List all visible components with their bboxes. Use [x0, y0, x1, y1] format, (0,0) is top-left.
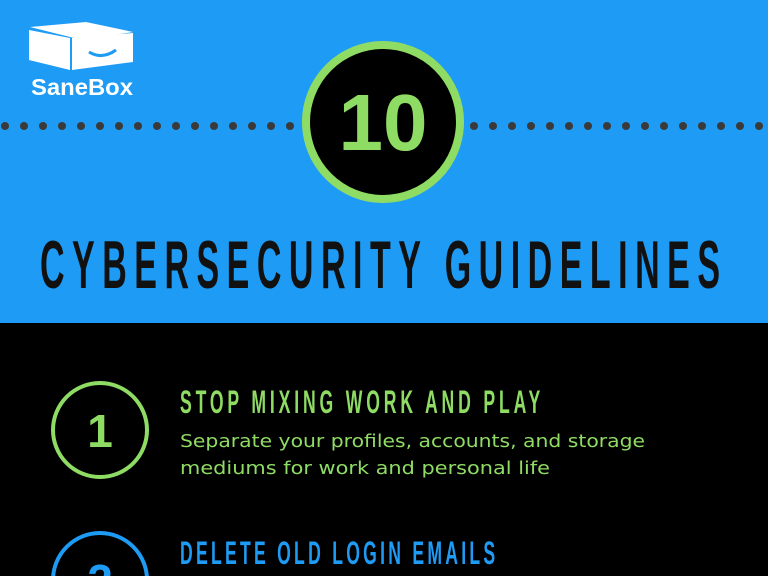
number circle 1 — [53, 383, 147, 477]
heading 2: DELETE OLD LOGIN EMAILS — [180, 537, 495, 571]
dotted line — [1, 122, 763, 130]
badge: 10 — [306, 45, 460, 199]
number circle 2 — [53, 533, 147, 576]
logo: SaneBox — [29, 22, 133, 100]
heading 1: STOP MIXING WORK AND PLAY — [180, 386, 540, 420]
item 2 — [53, 533, 495, 576]
icon: box — [29, 22, 133, 70]
title: CYBERSECURITY GUIDELINES — [40, 227, 720, 303]
item 1 — [53, 383, 645, 479]
body 1: Separate your profiles, accounts, and storage — [180, 431, 645, 452]
body 1: mediums for work and personal life — [180, 458, 550, 479]
number circle 1: 1 — [87, 405, 113, 457]
logo text: SaneBox — [31, 74, 133, 100]
badge: 10: 10 — [339, 78, 427, 167]
header panel — [0, 0, 768, 323]
body 1 — [180, 431, 645, 479]
